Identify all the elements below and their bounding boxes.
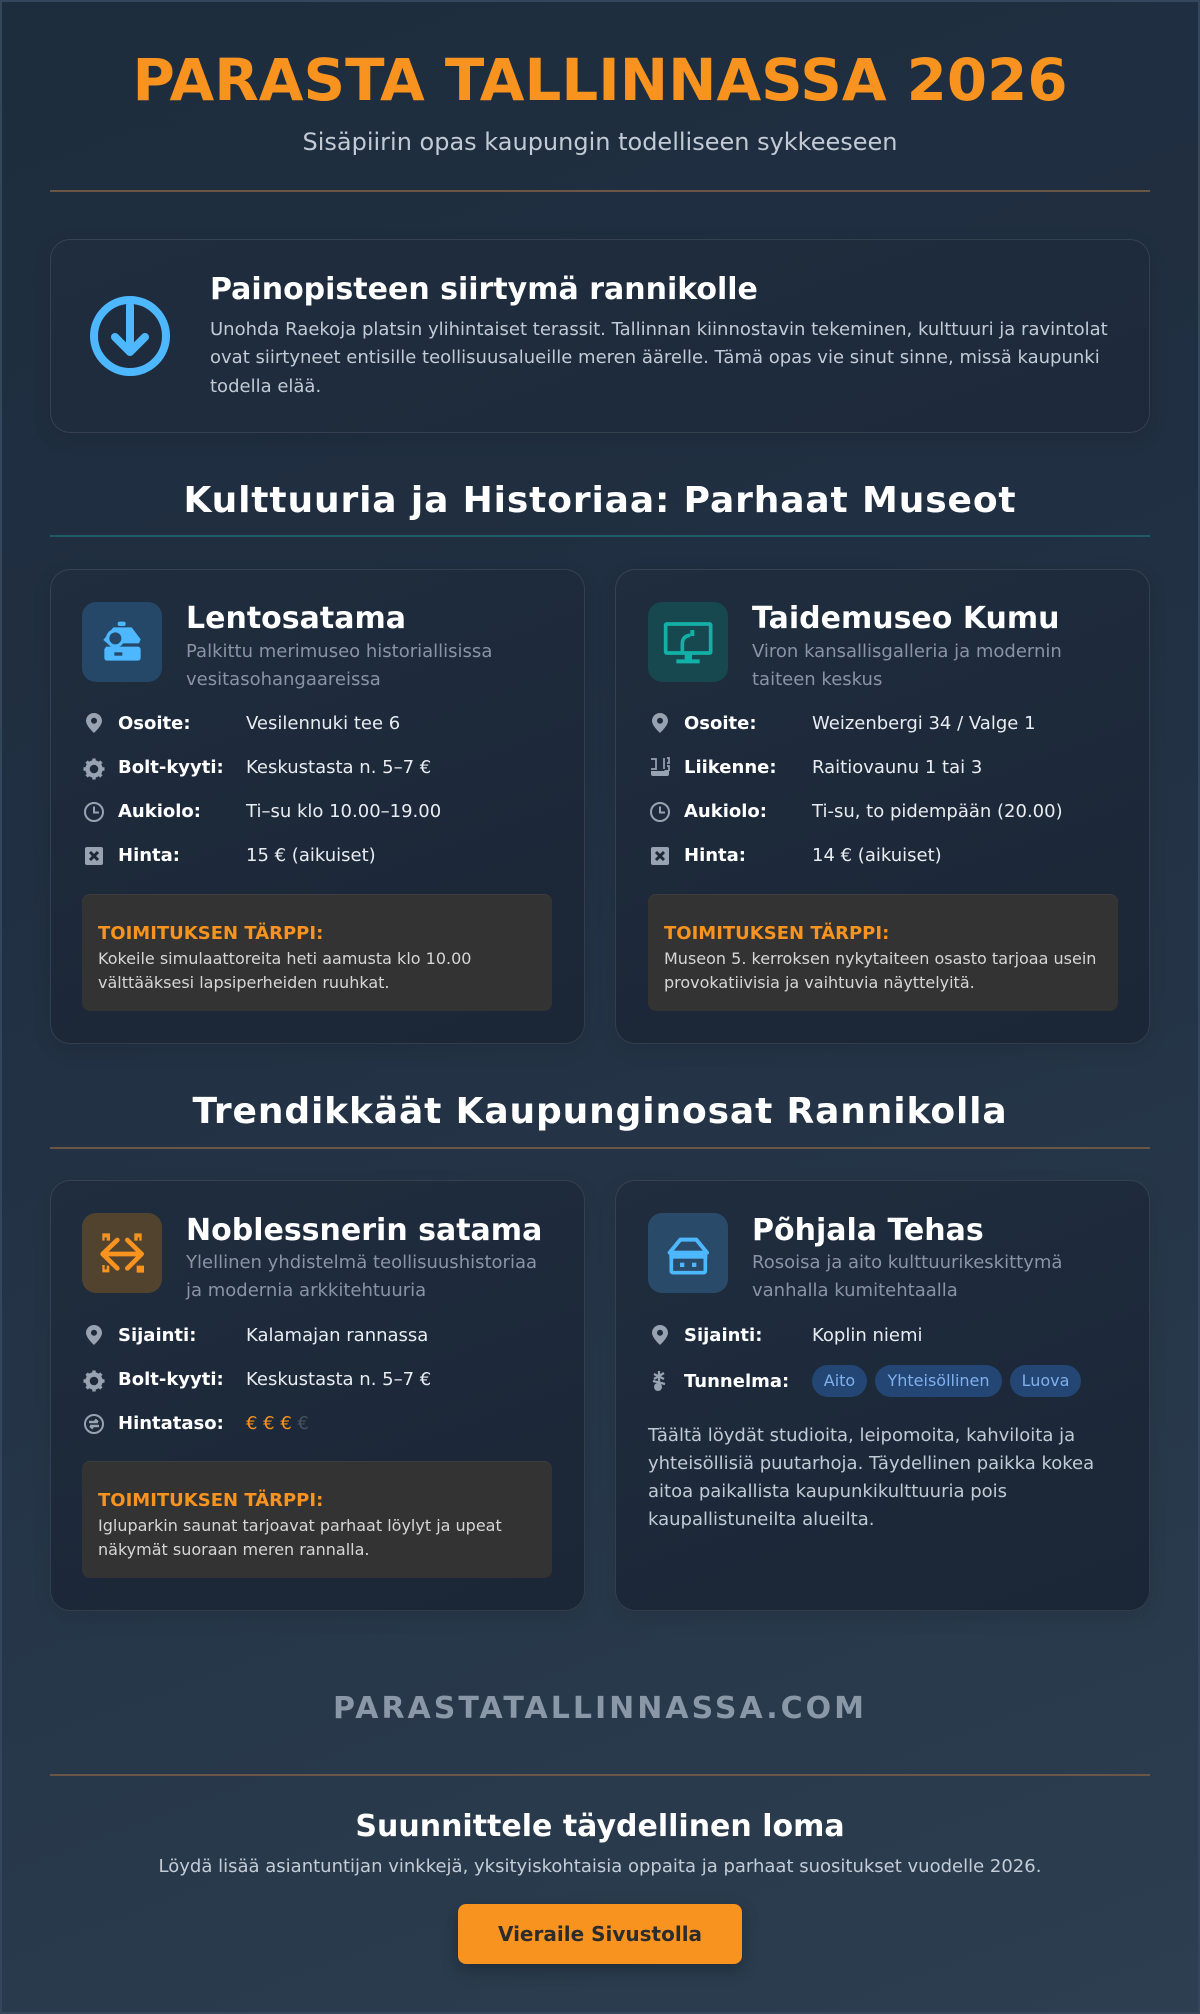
tag [1010, 1365, 1081, 1397]
icon: monitor [648, 602, 728, 682]
description [752, 641, 1062, 690]
icon: gear [84, 1370, 104, 1392]
address value: Weizenbergi 34 / Valge 1 [812, 713, 1036, 734]
name: Põhjala Tehas [752, 1213, 984, 1248]
tag: Aito [824, 1371, 855, 1390]
description text: Täältä löydät studioita, leipomoita, kahviloita ja [648, 1424, 1075, 1446]
name: Taidemuseo Kumu [752, 601, 1060, 636]
mood label: Tunnelma: [684, 1371, 789, 1392]
heading: museums: Kulttuuria ja Historiaa: Parhaat Museot [183, 480, 1017, 521]
tip text: välttääksesi lapsiperheiden ruuhkat. [98, 973, 389, 992]
address label: Osoite: [118, 713, 191, 734]
tip text: provokatiivisia ja vaihtuvia näyttelyitä. [664, 973, 975, 992]
address value: Vesilennuki tee 6 [246, 713, 400, 734]
tip text: näkymät suoraan meren rannalla. [98, 1540, 370, 1559]
tip text: Museon 5. kerroksen nykytaiteen osasto tarjoaa usein [664, 949, 1096, 968]
description text [648, 1424, 1094, 1530]
panel: Noblessner [50, 1180, 585, 1611]
icon: price [651, 847, 669, 865]
description [186, 641, 492, 690]
price label: Hinta: [118, 845, 180, 866]
price value: 14 € (aikuiset) [812, 845, 942, 866]
tag [875, 1365, 1002, 1397]
location value: Kalamajan rannassa [246, 1325, 428, 1346]
tag: Yhteisöllinen [887, 1371, 990, 1390]
callout: tip [82, 1461, 552, 1578]
button: Vieraile Sivustolla [498, 1922, 702, 1946]
description text: kaupallistuneilta alueilta. [648, 1509, 874, 1530]
icon: gear [84, 758, 104, 780]
intro text: todella elää. [210, 376, 321, 397]
tip text: Igluparkin saunat tarjoavat parhaat löylyt ja upeat [98, 1516, 502, 1535]
price label: Hinta: [684, 845, 746, 866]
hours value: Ti–su klo 10.00–19.00 [246, 801, 441, 822]
location value: Koplin niemi [812, 1325, 922, 1346]
location label: Sijainti: [118, 1325, 196, 1346]
Bolt label: Bolt-kyyti: [118, 757, 224, 778]
intro text: ovat siirtyneet entisille teollisuusalueille meren äärelle. Tämä opas vie sinut sinne, missä kaupunki [210, 347, 1100, 368]
icon: pin [652, 713, 668, 733]
tip text: Kokeile simulaattoreita heti aamusta klo 10.00 [98, 949, 471, 968]
icon: clock [650, 802, 670, 822]
hours label: Aukiolo: [118, 801, 201, 822]
Bolt value: Keskustasta n. 5–7 € [246, 1369, 431, 1390]
button [458, 1904, 742, 1964]
intro heading: Painopisteen siirtymä rannikolle [210, 272, 758, 307]
icon: market house [648, 1213, 728, 1293]
mood tags [812, 1365, 1081, 1397]
tip text [98, 949, 471, 992]
Bolt label: Bolt-kyyti: [118, 1369, 224, 1390]
description: Rosoisa ja aito kulttuurikeskittymä [752, 1252, 1062, 1273]
call to action text: Löydä lisää asiantuntijan vinkkejä, yksityiskohtaisia oppaita ja parhaat suositukset vuodelle 2026. [159, 1856, 1041, 1877]
title: PARASTA TALLINNASSA 2026 [132, 46, 1068, 114]
icon: plant [652, 1371, 666, 1391]
transit label: Liikenne: [684, 757, 777, 778]
description [186, 1252, 537, 1301]
intro text [210, 319, 1108, 397]
transit value: Raitiovaunu 1 tai 3 [812, 757, 982, 778]
description: vesitasohangaareissa [186, 669, 381, 690]
address label: Osoite: [684, 713, 757, 734]
icon: tram [651, 757, 670, 776]
subtitle: Sisäpiirin opas kaupungin todelliseen sykkeeseen [302, 128, 898, 156]
callout: tip [648, 894, 1118, 1011]
tip heading: TOIMITUKSEN TÄRPPI: [664, 923, 889, 944]
price level label: Hintataso: [118, 1413, 224, 1434]
panel: intro [50, 239, 1150, 433]
description: taiteen keskus [752, 669, 882, 690]
tag: Luova [1022, 1371, 1069, 1390]
panel: Põhjala [615, 1180, 1150, 1611]
description: Palkittu merimuseo historiallisissa [186, 641, 492, 662]
icon: clock [84, 802, 104, 822]
tip text [98, 1516, 502, 1559]
call to action heading: Suunnittele täydellinen loma [355, 1809, 845, 1844]
callout: tip [82, 894, 552, 1011]
icon: price [85, 847, 103, 865]
tip heading: TOIMITUKSEN TÄRPPI: [98, 923, 323, 944]
price level value: € € € € [246, 1413, 309, 1434]
description [752, 1252, 1062, 1301]
description: Viron kansallisgalleria ja modernin [752, 641, 1062, 662]
tip text [664, 949, 1096, 992]
description text: yhteisöllisiä puutarhoja. Täydellinen paikka kokea [648, 1453, 1094, 1474]
name: Noblessnerin satama [186, 1213, 542, 1248]
tip heading: TOIMITUKSEN TÄRPPI: [98, 1490, 323, 1511]
description: ja modernia arkkitehtuuria [186, 1280, 426, 1301]
description text: aitoa paikallista kaupunkikulttuuria pois [648, 1481, 1007, 1502]
hours value: Ti-su, to pidempään (20.00) [812, 801, 1063, 822]
intro text: Unohda Raekoja platsin ylihintaiset terassit. Tallinnan kiinnostavin tekeminen, kulttuuri ja ravintolat [210, 319, 1108, 340]
icon: price level [84, 1414, 104, 1434]
description: vanhalla kumitehtaalla [752, 1280, 958, 1301]
hours label: Aukiolo: [684, 801, 767, 822]
icon: pin [652, 1325, 668, 1345]
icon: down arrow in circle [90, 296, 170, 376]
Bolt value: Keskustasta n. 5–7 € [246, 757, 431, 778]
description: Ylellinen yhdistelmä teollisuushistoriaa [186, 1252, 537, 1273]
price value: 15 € (aikuiset) [246, 845, 376, 866]
name: Lentosatama [186, 601, 406, 636]
tag [812, 1365, 867, 1397]
brand: PARASTATALLINNASSA.COM [333, 1691, 867, 1726]
icon: seaplane harbour [82, 602, 162, 682]
icon: pin [86, 1325, 102, 1345]
location label: Sijainti: [684, 1325, 762, 1346]
heading: districts: Trendikkäät Kaupunginosat Rannikolla [192, 1091, 1008, 1132]
panel: Kumu [615, 569, 1150, 1044]
panel: Lentosatama [50, 569, 585, 1044]
icon: expand arrows [82, 1213, 162, 1293]
icon: pin [86, 713, 102, 733]
